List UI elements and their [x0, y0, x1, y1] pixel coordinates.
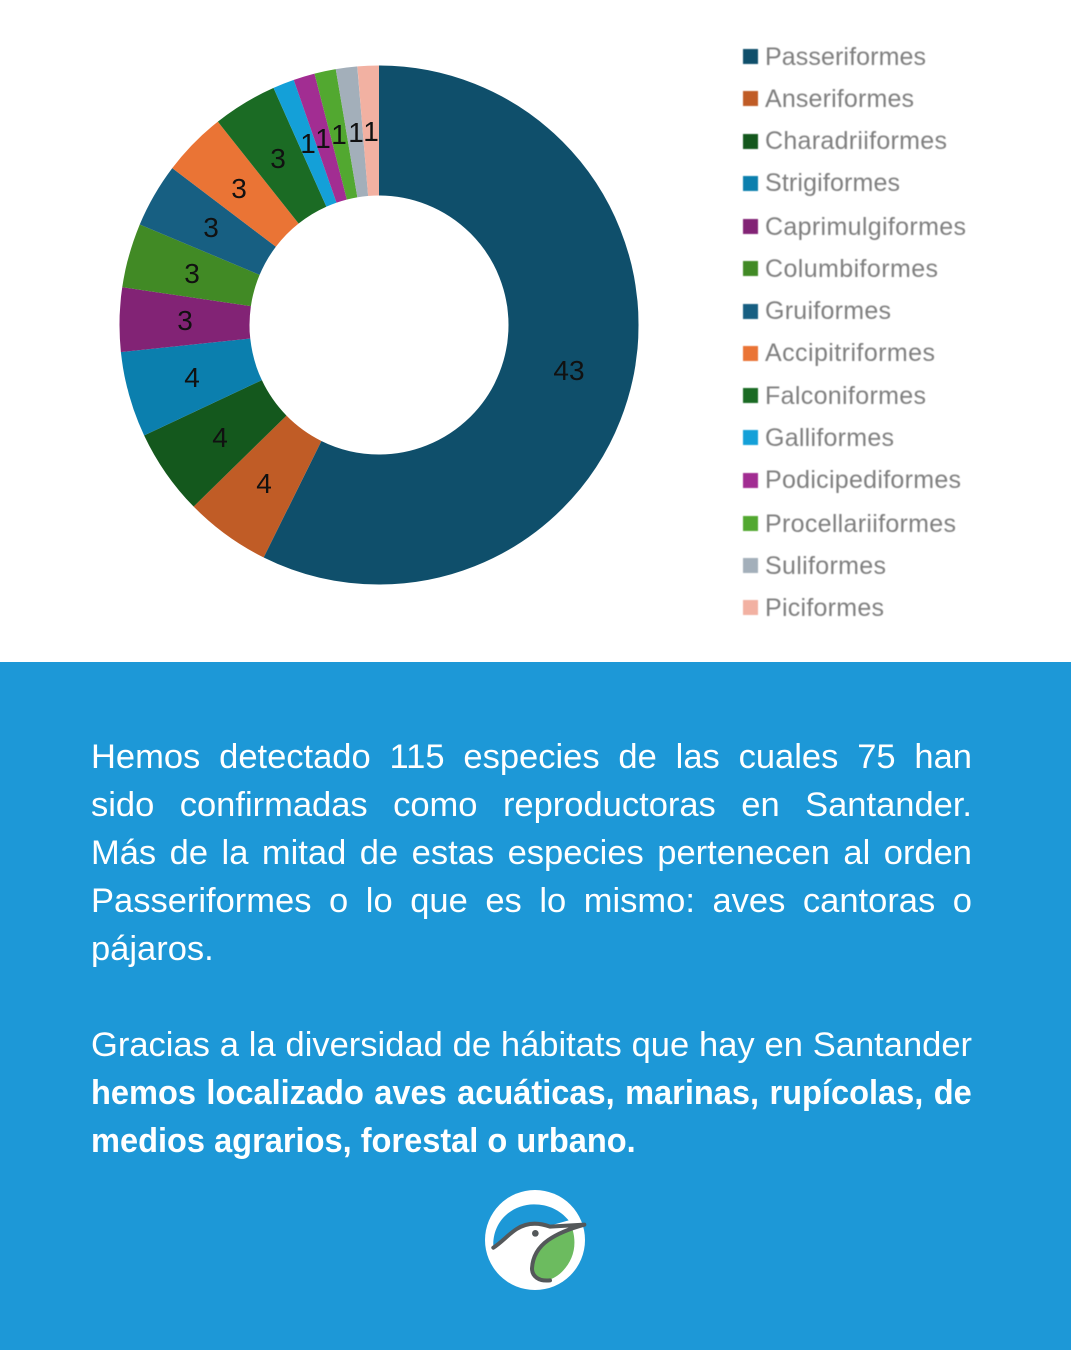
legend item: Caprimulgiformes: Caprimulgiformes [765, 213, 966, 241]
text block: first paragraph [91, 738, 972, 968]
text block: first paragraph: Passeriformes o lo que es lo mismo: aves cantoras o [91, 882, 972, 920]
segment: Charadriiformes 4 [184, 130, 574, 520]
legend item: Charadriiformes: Charadriiformes [765, 127, 947, 155]
value labels: 4 [212, 422, 228, 453]
segment: Anseriformes 4 [184, 130, 574, 520]
value labels: 3 [184, 258, 200, 289]
segment: Columbiformes 3 [184, 130, 574, 520]
legend item: Strigiformes: Strigiformes [765, 169, 900, 197]
value labels: 1 [300, 128, 316, 159]
legend item: Gruiformes: Gruiformes [765, 297, 891, 325]
icon: bird logo [485, 1190, 586, 1290]
legend item: Anseriformes: Anseriformes [765, 85, 914, 113]
segment: Podicipediformes 1 [184, 130, 574, 520]
legend item: Passeriformes: Passeriformes [765, 43, 926, 71]
legend item: Procellariiformes: Procellariiformes [765, 510, 956, 538]
donut chart [120, 66, 638, 584]
value labels: 3 [177, 305, 193, 336]
text block: first paragraph: sido confirmadas como reproductoras en Santander. [91, 786, 972, 824]
value labels: 4 [184, 362, 200, 393]
segment: Caprimulgiformes 3 [184, 130, 574, 520]
legend item: Podicipediformes: Podicipediformes [765, 466, 961, 494]
value labels: 43 [553, 355, 585, 386]
legend [742, 43, 966, 622]
panel: blue text background [0, 662, 1071, 1350]
value labels: 1 [363, 116, 379, 147]
value labels: 1 [348, 117, 364, 148]
legend item: Accipitriformes: Accipitriformes [765, 339, 935, 367]
text block: second paragraph: hemos localizado aves acuáticas, marinas, rupícolas, de [91, 1074, 972, 1112]
legend item: Columbiformes: Columbiformes [765, 255, 938, 283]
text block: second paragraph: medios agrarios, forestal o urbano. [91, 1122, 636, 1160]
segment: Passeriformes 43 [184, 130, 574, 520]
value labels: 4 [256, 468, 272, 499]
text block: second paragraph [91, 1026, 972, 1160]
text block: first paragraph: Hemos detectado 115 especies de las cuales 75 han [91, 738, 972, 776]
segment: Strigiformes 4 [184, 130, 574, 520]
text block: second paragraph: Gracias a la diversidad de hábitats que hay en Santander [91, 1026, 972, 1064]
legend item: Suliformes: Suliformes [765, 552, 886, 580]
legend item: Galliformes: Galliformes [765, 424, 894, 452]
segment: Suliformes 1 [184, 130, 574, 520]
value labels [177, 116, 585, 499]
value labels: 3 [203, 212, 219, 243]
legend item: Piciformes: Piciformes [765, 594, 884, 622]
segment: Accipitriformes 3 [184, 130, 574, 520]
value labels: 1 [331, 119, 347, 150]
segment: Falconiformes 3 [184, 130, 574, 520]
segment: Galliformes 1 [184, 130, 574, 520]
segment: Gruiformes 3 [184, 130, 574, 520]
segment: Procellariiformes 1 [184, 130, 574, 520]
text block: first paragraph: pájaros. [91, 930, 214, 968]
value labels: 1 [315, 123, 331, 154]
segment: Piciformes 1 [184, 130, 574, 520]
text block: first paragraph: Más de la mitad de estas especies pertenecen al orden [91, 834, 972, 872]
value labels: 3 [270, 143, 286, 174]
legend item: Falconiformes: Falconiformes [765, 382, 926, 410]
value labels: 3 [231, 173, 247, 204]
